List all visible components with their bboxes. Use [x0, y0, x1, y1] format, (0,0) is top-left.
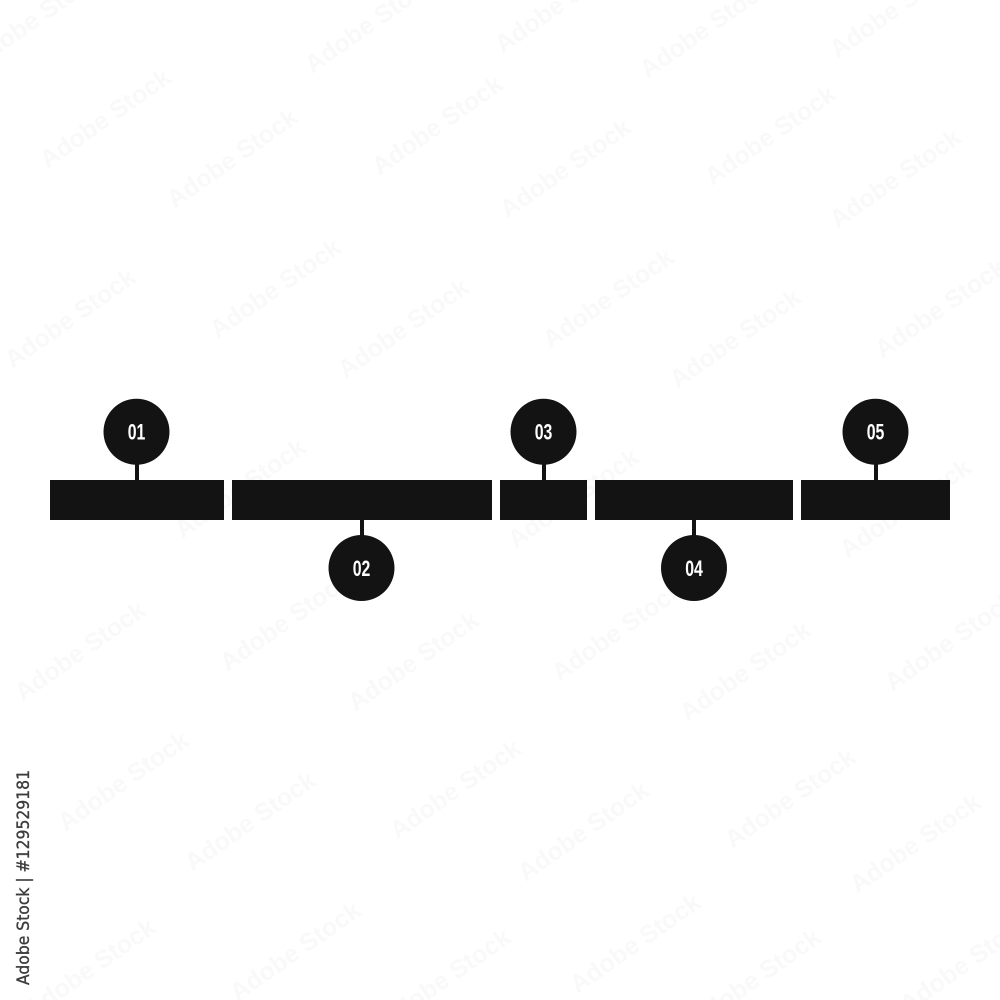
faint background watermark pattern: Adobe Stock: [180, 766, 321, 877]
marker 02: 02: [353, 558, 370, 582]
marker 03: [510, 399, 576, 481]
faint background watermark pattern: Adobe Stock: [53, 726, 194, 837]
faint background watermark pattern: Adobe Stock: [367, 70, 508, 181]
marker 04: 04: [685, 558, 703, 582]
faint background watermark pattern: Adobe Stock: [10, 596, 151, 707]
faint background watermark pattern: Adobe Stock: [205, 233, 346, 344]
marker 03: 03: [535, 421, 552, 445]
faint background watermark pattern: Adobe Stock: [385, 734, 526, 845]
faint background watermark pattern: Adobe Stock: [215, 566, 356, 677]
faint background watermark pattern: Adobe Stock: [495, 113, 636, 224]
step 2 segment: [232, 480, 492, 520]
faint background watermark pattern: Adobe Stock: [835, 453, 976, 564]
marker 01: 01: [128, 421, 146, 445]
stock id caption: Adobe Stock | #129529181: [14, 770, 34, 985]
step 4 segment: [595, 480, 793, 520]
faint background watermark pattern: Adobe Stock: [565, 888, 706, 999]
faint background watermark pattern: Adobe Stock: [720, 743, 861, 854]
faint background watermark pattern: Adobe Stock: [343, 606, 484, 717]
faint background watermark pattern: Adobe Stock: [0, 263, 141, 374]
faint background watermark pattern: Adobe Stock: [35, 63, 176, 174]
faint background watermark pattern: Adobe Stock: [845, 788, 986, 899]
faint background watermark pattern: Adobe Stock: [162, 103, 303, 214]
faint background watermark pattern: Adobe Stock: [503, 443, 644, 554]
faint background watermark pattern: Adobe Stock: [547, 576, 688, 687]
marker 01: [104, 399, 170, 481]
faint background watermark pattern: Adobe Stock: [170, 433, 311, 544]
marker 04: [661, 519, 727, 601]
marker 05: 05: [867, 421, 885, 445]
marker 02: [328, 519, 394, 601]
step 5 segment: [801, 480, 950, 520]
step 3 segment: [500, 480, 587, 520]
timeline: [50, 399, 950, 601]
faint background watermark pattern: Adobe Stock: [675, 616, 816, 727]
faint background watermark pattern: Adobe Stock: [538, 243, 679, 354]
faint background watermark pattern: Adobe Stock: [513, 776, 654, 887]
faint background watermark pattern: Adobe Stock: [825, 123, 966, 234]
step 1 segment: [50, 480, 224, 520]
marker 05: [842, 399, 908, 481]
faint background watermark pattern: Adobe Stock: [333, 273, 474, 384]
faint background watermark pattern: Adobe Stock: [700, 80, 841, 191]
faint background watermark pattern: Adobe Stock: [665, 283, 806, 394]
